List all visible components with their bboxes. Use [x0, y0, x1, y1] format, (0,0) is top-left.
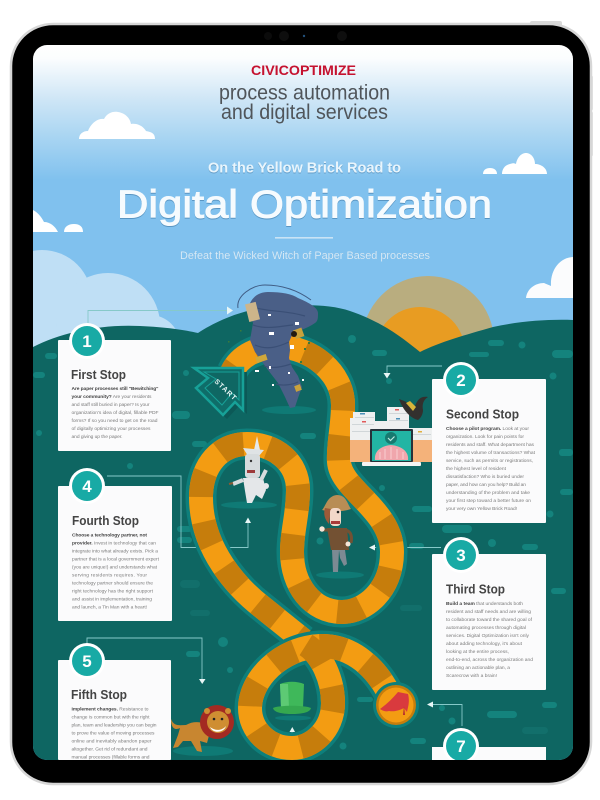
- road: lower loop section: [250, 645, 392, 748]
- body text: Build a team that understands both: [446, 601, 523, 607]
- body text: understanding of the problem and take: [446, 490, 530, 496]
- title divider: [275, 237, 333, 239]
- card: seventh stop: [432, 728, 546, 764]
- step number 4: 4: [82, 477, 92, 496]
- body text: Scarecrow with a brain!: [446, 673, 497, 679]
- body text: your very own Yellow Brick Road!: [446, 506, 517, 512]
- body text: partner that is a local government expert: [72, 556, 160, 562]
- cowardly lion: [171, 705, 234, 752]
- subtitle: On the Yellow Brick Road to: [208, 160, 401, 176]
- body text: and giving up the paper.: [72, 434, 122, 440]
- body text: and launch, a Tin Man with a heart!: [72, 604, 147, 610]
- tornado: [228, 285, 318, 408]
- decorative pills and dots: [33, 335, 573, 750]
- step number 2: 2: [456, 371, 466, 390]
- card: first stop: [58, 323, 171, 451]
- body text: provider. Invest in technology that can: [72, 540, 156, 546]
- body text: Choose a technology partner, not: [72, 532, 147, 538]
- body text: plan, team and leadership you can begin: [72, 722, 157, 728]
- step number 3: [443, 537, 479, 573]
- body text: to prove the value of moving processes: [72, 730, 155, 736]
- step number 3: 3: [456, 546, 466, 565]
- body text: online and inevitably abandon paper: [72, 738, 152, 744]
- road: upper winding section: [201, 347, 392, 640]
- tagline: [219, 82, 390, 124]
- body text: [72, 706, 157, 760]
- heading: Fifth Stop: [71, 687, 127, 702]
- body text: (you are unique!) and understands what: [72, 564, 158, 570]
- laptop: [370, 429, 413, 462]
- cloud: left white: [33, 210, 83, 232]
- body text: manual processes (fillable forms and: [72, 754, 150, 760]
- body text: outlining an actionable plan, a: [446, 665, 510, 671]
- body text: Implement changes. Resistance to: [72, 706, 149, 712]
- cloud: upper left white: [79, 112, 155, 139]
- body text: the highest volume of transactions? What: [446, 450, 536, 456]
- step number 4: [69, 468, 105, 504]
- heading: Third Stop: [446, 582, 505, 596]
- yellow brick road: [201, 347, 392, 748]
- body text: organization's idea of digital, fillable PDF: [72, 410, 158, 416]
- body text: of digitally optimizing your processes: [72, 426, 151, 432]
- body text: right technology has the right support: [72, 588, 154, 594]
- background clouds left: [33, 250, 176, 347]
- body text: organization. Look for pain points for: [446, 434, 524, 440]
- start arrow: START: [213, 378, 238, 402]
- body text: Choose a pilot program. Look at your: [446, 426, 529, 432]
- body text: technology partner should ensure the: [72, 580, 153, 586]
- card: third stop: [432, 537, 546, 690]
- card: fourth stop: [58, 468, 172, 621]
- tin man: [229, 436, 269, 503]
- body text: residents and staff. What department has: [446, 442, 535, 448]
- sun: [366, 276, 492, 352]
- body text: Are paper processes still "Bewitching": [72, 386, 158, 392]
- heading: Second Stop: [446, 406, 519, 422]
- body text: and assist in implementation, training: [72, 596, 152, 602]
- tagline: defeat the witch: Defeat the Wicked Witch of Paper Based processes: [180, 250, 430, 262]
- body text: altogether. Get rid of redundant and: [72, 746, 148, 752]
- body text: to collaborate toward the shared goal of: [446, 617, 533, 623]
- bottom bezel cover: [33, 760, 573, 770]
- start arrow: [194, 368, 247, 419]
- green hills: [33, 305, 573, 760]
- body text: change is common but with the right: [72, 714, 150, 720]
- scarecrow: [319, 495, 351, 572]
- tagline: and digital services: [221, 101, 388, 124]
- ruby slipper: [373, 682, 419, 728]
- step number 7: 7: [456, 737, 466, 756]
- body text: [72, 386, 158, 440]
- body text: your community? Are your residents: [72, 394, 152, 400]
- tagline: process automation: [219, 82, 390, 104]
- folders: [350, 440, 371, 462]
- paper stacks, laptop, witch hat and brain: [350, 397, 432, 466]
- main title: Digital Optimization: [117, 184, 492, 226]
- card: fifth stop: [58, 643, 171, 760]
- body text: [446, 426, 536, 512]
- tornado debris: [228, 302, 310, 392]
- body text: about adding technology, it's about: [446, 641, 523, 647]
- step number 1: 1: [82, 332, 92, 351]
- body text: forms? If so you need to get on the road: [72, 418, 158, 424]
- body text: your first step toward a better future on: [446, 498, 531, 504]
- body text: service, such as permits or registrations,: [446, 458, 533, 464]
- witch hat: [399, 397, 428, 420]
- paper stacks: [350, 407, 432, 442]
- heading: Fourth Stop: [72, 513, 139, 528]
- step number 5: 5: [82, 652, 92, 671]
- body text: services. Digital Optimization isn't only: [446, 633, 530, 639]
- cloud: upper right white: [483, 153, 547, 174]
- step number 2: [443, 362, 479, 398]
- body text: resident and staff needs and are willing: [446, 609, 531, 615]
- body text: and staff still buried in paper? Is your: [72, 402, 150, 408]
- body text: end-to-end, across the organization and: [446, 657, 533, 663]
- body text: [446, 601, 533, 679]
- body text: serving residents requires. Your: [72, 572, 147, 578]
- card: second stop: [432, 362, 546, 523]
- cloud: right white: [526, 257, 574, 298]
- connector lines: [87, 306, 462, 760]
- green top hat: [273, 682, 311, 714]
- body text: dissatisfaction? Who is buried under: [446, 474, 524, 480]
- body text: paper, and how can you help? Build an: [446, 482, 526, 488]
- brand logo: CIVICOPTIMIZE: [251, 63, 356, 78]
- ground shadows: [173, 406, 364, 756]
- brain: [375, 445, 408, 460]
- body text: integrate into what already exists. Pick a: [72, 548, 158, 554]
- body text: the highest level of resident: [446, 466, 507, 472]
- body text: looking at the entire process,: [446, 649, 509, 655]
- body text: [72, 532, 160, 610]
- body text: automating processes through digital: [446, 625, 526, 631]
- heading: First Stop: [71, 367, 126, 382]
